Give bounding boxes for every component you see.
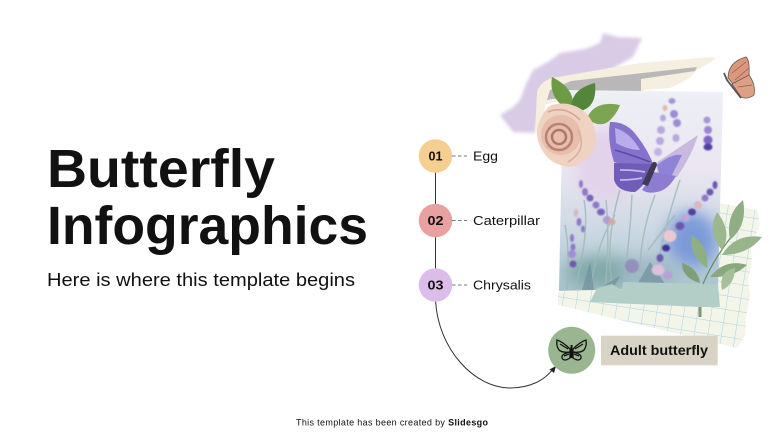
rose xyxy=(537,104,596,167)
grass strokes xyxy=(565,180,680,290)
step 01 xyxy=(419,139,498,173)
title line 1: Butterfly xyxy=(47,139,275,199)
connector line xyxy=(434,170,436,272)
small orange butterfly xyxy=(724,57,754,98)
green rose leaves xyxy=(551,77,620,124)
step 03: 03 xyxy=(428,278,444,292)
grid paper xyxy=(558,203,760,348)
cream torn tape xyxy=(535,57,716,133)
step 02: Caterpillar xyxy=(473,213,541,228)
step 03 xyxy=(419,268,532,302)
green circle with butterfly icon xyxy=(548,327,595,374)
watercolor wash xyxy=(500,33,642,133)
curved arrow xyxy=(436,300,556,388)
lavender sprigs xyxy=(568,98,718,279)
label: Adult butterfly xyxy=(610,343,709,358)
timeline xyxy=(419,139,556,388)
footer credit: This template has been created by Slidesgo xyxy=(296,418,488,428)
collage illustration xyxy=(500,33,762,348)
step 01: Egg xyxy=(473,148,498,164)
teal tape xyxy=(590,282,720,307)
title line 2: Infographics xyxy=(47,196,368,256)
step 01: 01 xyxy=(428,148,442,164)
green leaf branch xyxy=(682,200,762,317)
final stage: adult butterfly xyxy=(548,327,718,374)
subtitle: Here is where this template begins xyxy=(47,270,355,290)
step 02: 02 xyxy=(428,213,444,228)
lavender photo xyxy=(559,90,723,291)
purple butterfly xyxy=(609,122,698,193)
dark bottom grass xyxy=(582,262,668,291)
step 03: Chrysalis xyxy=(473,278,532,292)
label xyxy=(601,336,718,365)
step 02 xyxy=(419,204,541,237)
